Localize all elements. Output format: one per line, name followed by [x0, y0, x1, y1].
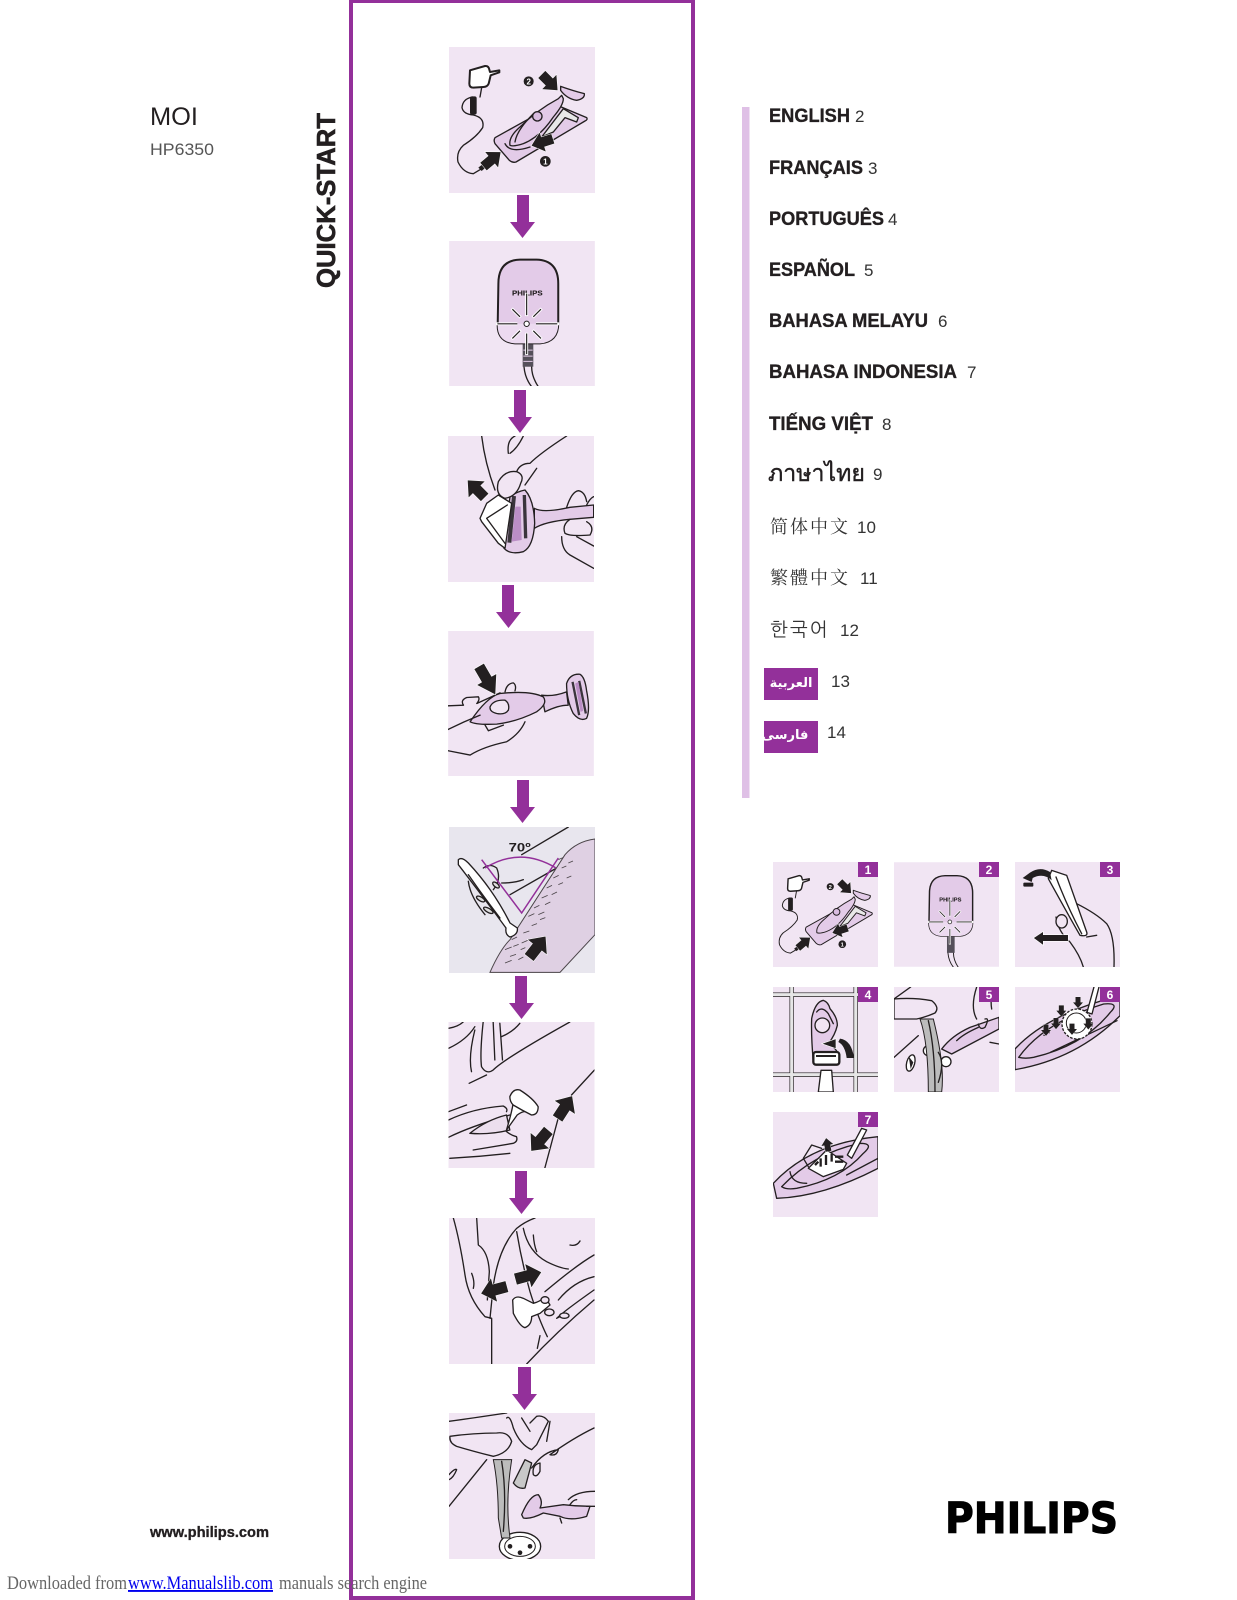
language list: 8 [882, 415, 891, 434]
small figure 2: charging light: PHILIPS [939, 898, 962, 904]
small figure 3: remove screw and cover: 3 [1107, 863, 1114, 877]
small figure 5: rinse under tap [894, 987, 999, 1092]
language list: PORTUGUÊS [769, 208, 884, 230]
small figure 1: connect charger: 2 [829, 885, 832, 891]
small figure 3: remove screw and cover [1015, 862, 1120, 967]
arrow: step 3 to 4 [496, 585, 521, 628]
step 2 panel: charging light [449, 241, 595, 386]
step 2 panel: charging light: PHILIPS [512, 291, 543, 298]
language list: BAHASA MELAYU [769, 311, 928, 332]
small figure 2: charging light [894, 862, 999, 967]
step 8 panel: rinsing razor [449, 1413, 595, 1559]
language list: 2 [855, 107, 864, 126]
language list: TIẾNG VIỆT [769, 413, 873, 435]
small figure 1: connect charger: 1 [841, 942, 845, 948]
arrow: step 1 to 2 [510, 195, 535, 238]
small figure 6: clean filter with brush: 6 [1107, 988, 1114, 1002]
download footer line: manuals search engine [279, 1573, 427, 1594]
download footer line: Downloaded from [7, 1573, 127, 1594]
language list: 한국어 [770, 620, 830, 641]
language list: ภาษาไทย [768, 460, 865, 486]
small figure 7: clean cutter unit [773, 1112, 878, 1217]
language list: 7 [967, 363, 976, 382]
language list: 12 [840, 621, 859, 640]
arrow: step 5 to 6 [509, 976, 534, 1019]
step 1 panel: connect charger and place razor: 2 [526, 77, 531, 86]
step 1 panel: connect charger and place razor [449, 47, 595, 193]
step 1 panel: connect charger and place razor: 1 [543, 157, 548, 166]
language list: 9 [873, 465, 882, 484]
step 5 panel: shaving at 70 degrees [449, 827, 595, 973]
arrow: step 2 to 3 [508, 390, 532, 433]
language list: 5 [864, 261, 873, 280]
language index bar [742, 107, 750, 798]
website: www.philips.com [149, 1524, 269, 1541]
Arabic language badge: العربية [770, 676, 812, 691]
step 5 panel: shaving at 70 degrees: 70º [509, 840, 531, 854]
small figure 6: clean filter with brush [1015, 986, 1120, 1092]
step 3 panel: remove protective cap [448, 436, 594, 582]
language list: 13 [831, 672, 850, 691]
download footer line: www.Manualslib.com [128, 1573, 273, 1594]
language list: 4 [888, 210, 897, 229]
purple frame around step strip [351, 1, 693, 1598]
angle mark [482, 857, 558, 913]
leg [490, 839, 595, 972]
language list: 繁體中文 [770, 568, 850, 588]
model number: HP6350 [150, 140, 214, 159]
arrow: step 7 to 8 [512, 1367, 537, 1410]
language list: 10 [857, 518, 876, 537]
product name: MOI [150, 103, 198, 131]
language list: 11 [860, 569, 878, 588]
arrow: step 6 to 7 [509, 1171, 534, 1214]
language list: 6 [938, 312, 947, 331]
small figure 2: charging light: 2 [986, 863, 993, 877]
razor and hand [468, 866, 499, 915]
Persian language badge [762, 721, 818, 753]
vertical heading: quick-start: QUICK-START [311, 113, 341, 288]
small figure 7: clean cutter unit: 7 [865, 1113, 872, 1127]
language list: ENGLISH [769, 106, 850, 127]
PHILIPS logo: PHILIPS [945, 1494, 1118, 1544]
small figure 5: rinse under tap: 5 [986, 988, 993, 1002]
step 6 panel: bikini area shaving [448, 1022, 594, 1168]
language list [768, 106, 976, 742]
step 7 panel: underarm shaving [449, 1218, 595, 1364]
language list: 简体中文 [770, 517, 850, 537]
Persian language badge: فارسی [762, 728, 808, 743]
step 4 panel: switch on razor [448, 631, 594, 776]
language list: FRANÇAIS [769, 158, 863, 179]
language list: BAHASA INDONESIA [769, 362, 957, 383]
language list: ESPAÑOL [769, 259, 855, 281]
Arabic language badge [764, 668, 818, 700]
small figure 1: connect charger [773, 862, 878, 967]
small figure 4: hang razor on tile wall: 4 [865, 988, 872, 1002]
language list: 14 [827, 723, 846, 742]
small figure 4: hang razor on tile wall [773, 987, 878, 1092]
language list: 3 [868, 159, 877, 178]
download footer line [7, 1573, 427, 1594]
arrow: step 4 to 5 [510, 780, 535, 823]
small figure 1: connect charger: 1 [865, 863, 872, 877]
